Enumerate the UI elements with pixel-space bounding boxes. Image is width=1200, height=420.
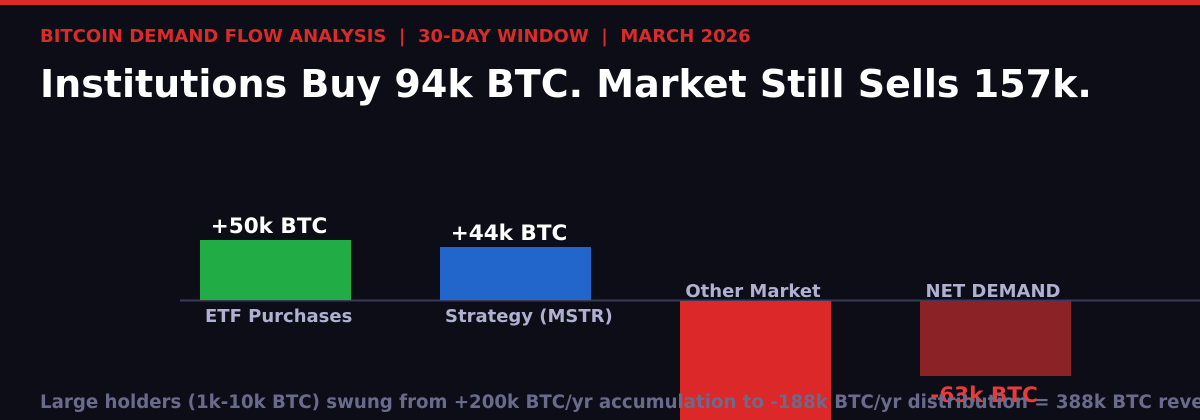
bar: Net Demand: NET DEMAND: [926, 281, 1060, 302]
title: Institutions Buy 94k BTC. Market Still Sells 157k.: [40, 62, 1092, 106]
bar: Net Demand: [920, 281, 1071, 408]
bar chart: [180, 214, 1200, 420]
bar: ETF purchases: [200, 214, 352, 327]
bar: Other Market: Other Market: [685, 281, 821, 302]
bar: ETF purchases: +50k BTC: [211, 214, 327, 239]
bar: Net Demand: -63k BTC: [930, 383, 1038, 408]
bar: Strategy: +44k BTC: [451, 221, 567, 246]
bar: Strategy: [440, 221, 613, 327]
kicker subtitle: BITCOIN DEMAND FLOW ANALYSIS | 30-DAY WINDOW | MARCH 2026: [40, 26, 751, 47]
bar: Other Market: [680, 281, 831, 420]
top accent bar: [0, 0, 1200, 5]
bar: ETF purchases: ETF Purchases: [205, 306, 352, 327]
bar: Strategy: Strategy (MSTR): [445, 306, 613, 327]
